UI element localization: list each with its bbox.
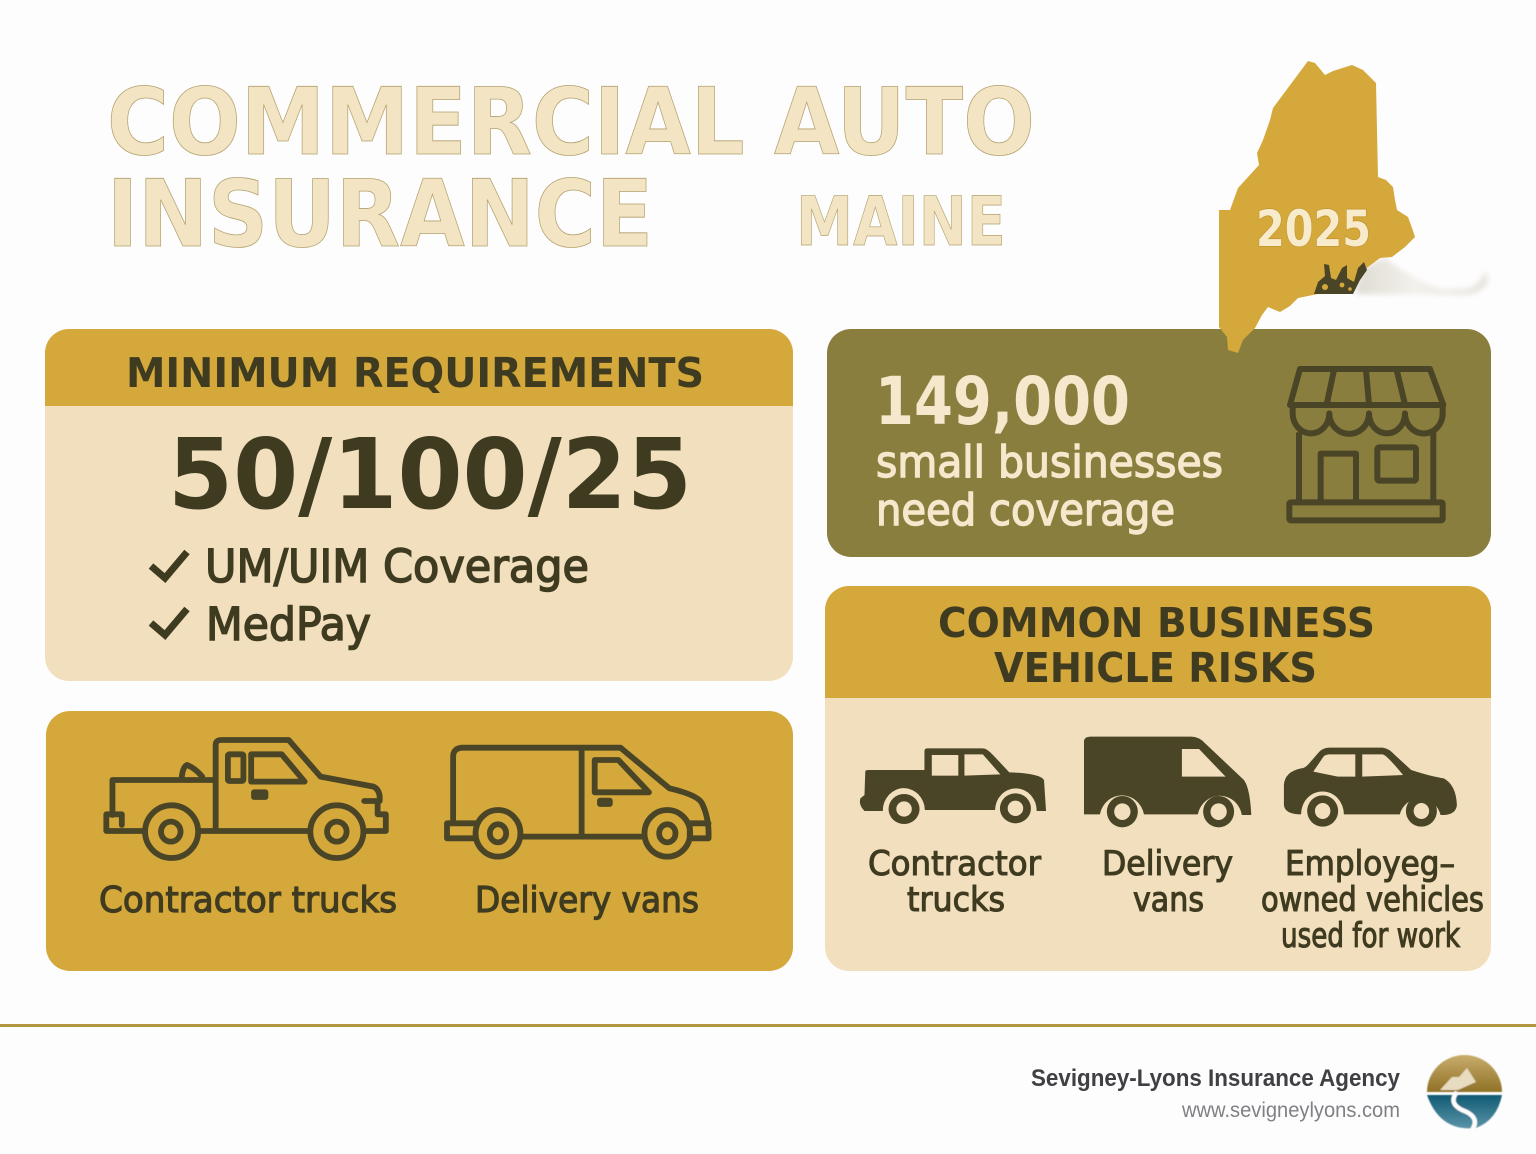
label: delivery vans: vans <box>1133 880 1204 920</box>
map: Maine with year <box>1219 61 1488 353</box>
label: delivery vans: Delivery vans <box>475 880 699 921</box>
footer agency name: Sevigney-Lyons Insurance Agency <box>1031 1065 1401 1092</box>
map: Maine state shape <box>1219 61 1415 353</box>
icon: pickup truck silhouette <box>860 748 1046 824</box>
label: employee-owned vehicles: owned vehicles <box>1261 880 1484 920</box>
title: INSURANCE <box>107 160 653 268</box>
label: contractor trucks: trucks <box>907 880 1005 920</box>
footer website: www.sevigneylyons.com <box>1181 1099 1400 1122</box>
icon: pickup truck outline <box>106 740 386 858</box>
map coast detail <box>1314 262 1367 294</box>
title <box>107 68 1035 268</box>
panel: minimum requirements <box>45 329 793 681</box>
label: contractor trucks <box>868 844 1041 920</box>
checklist item: UM/UIM coverage: UM/UIM Coverage <box>205 540 589 593</box>
checklist item: MedPay: MedPay <box>206 598 371 651</box>
panel heading: minimum requirements <box>45 329 793 406</box>
label: delivery vans <box>1102 844 1233 920</box>
panel: common business vehicle risks <box>825 586 1491 971</box>
stat number: 149,000 <box>875 363 1130 440</box>
label: employee-owned vehicles: used for work <box>1281 916 1460 956</box>
stat caption: small businesses <box>876 437 1223 488</box>
panel heading: common business vehicle risks: VEHICLE RISKS <box>994 644 1317 692</box>
label: contractor trucks: Contractor <box>868 844 1041 884</box>
label: delivery vans: Delivery <box>1102 844 1233 884</box>
icon: delivery van outline <box>447 748 709 857</box>
limits figure: 50/100/25 <box>168 418 692 531</box>
panel heading: common business vehicle risks: COMMON BUSINESS <box>938 599 1375 647</box>
subtitle: Maine: MAINE <box>796 183 1006 262</box>
label: contractor trucks: Contractor trucks <box>99 880 397 921</box>
map smudge <box>1355 258 1488 295</box>
stat caption: need coverage <box>876 485 1175 536</box>
year label: 2025 <box>1256 200 1371 258</box>
label: employee-owned vehicles <box>1261 844 1484 956</box>
icon: delivery van silhouette <box>1084 737 1251 827</box>
stat caption <box>876 437 1223 536</box>
logo: mountain and river <box>1427 1055 1502 1130</box>
icon: car silhouette <box>1284 748 1457 827</box>
panel: small businesses stat <box>827 329 1491 557</box>
label: employee-owned vehicles: Employeg– <box>1285 844 1455 884</box>
title: COMMERCIAL AUTO <box>107 68 1035 176</box>
panel: vehicle types <box>46 711 793 971</box>
icon: storefront <box>1289 369 1443 520</box>
panel heading: minimum requirements: MINIMUM REQUIREMENTS <box>126 349 704 397</box>
panel heading: common business vehicle risks <box>825 586 1491 698</box>
